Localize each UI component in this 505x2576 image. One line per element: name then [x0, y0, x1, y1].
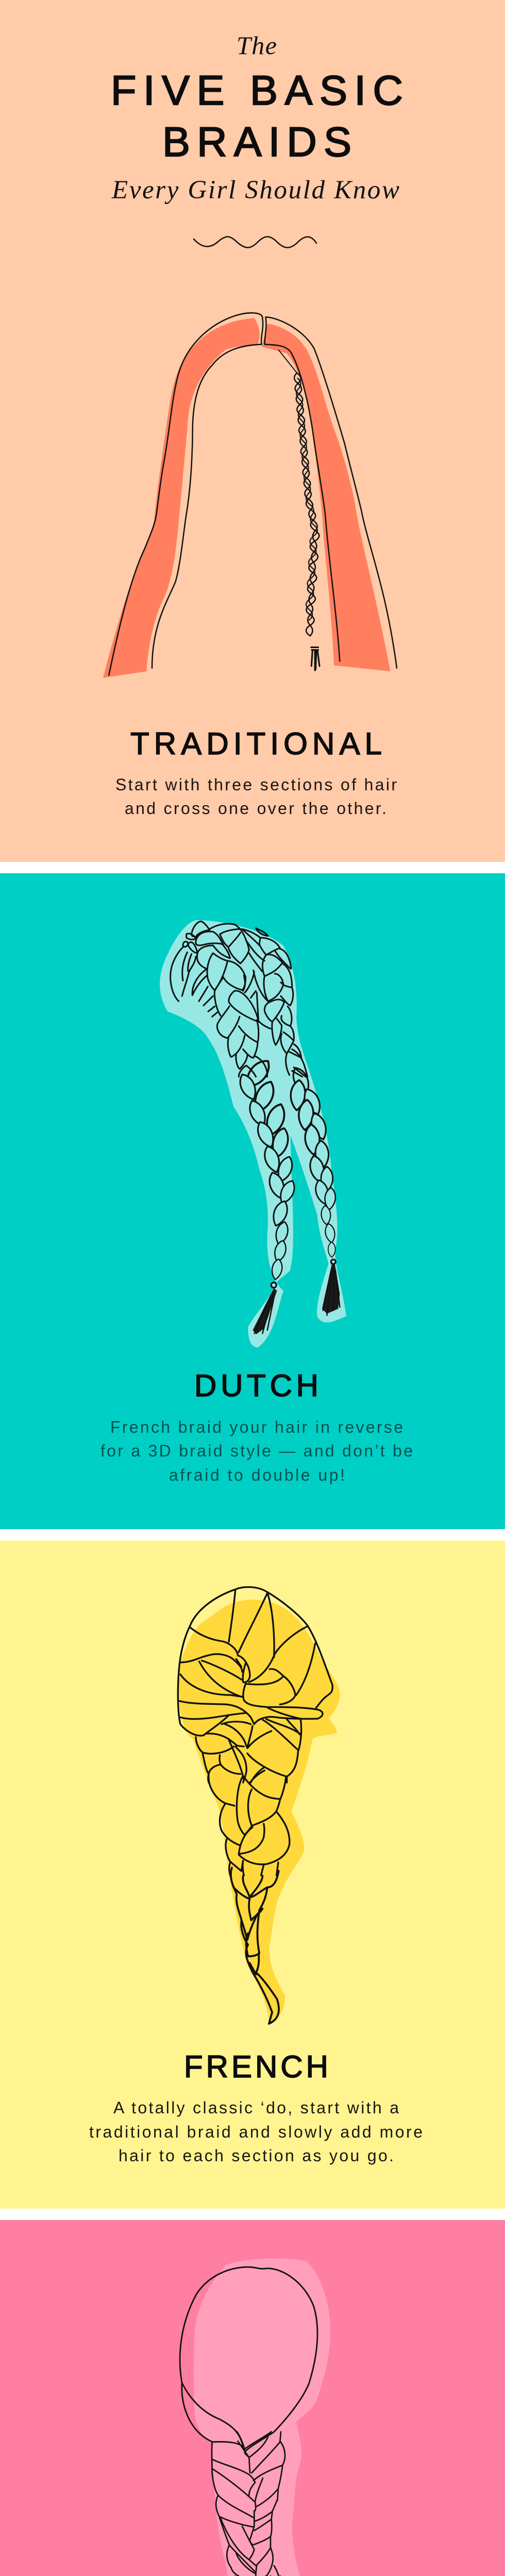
title [111, 31, 403, 205]
panel: traditional braid [0, 0, 505, 862]
description: dutch: French braid your hair in reverse [110, 1418, 403, 1436]
description: french [89, 2098, 423, 2165]
title: Every Girl Should Know [111, 176, 399, 205]
title: BRAIDS [162, 119, 351, 165]
panel: french braid [0, 1540, 505, 2209]
illustration: traditional braid [103, 313, 397, 678]
heading: french: FRENCH [184, 2049, 328, 2084]
description: dutch: afraid to double up! [169, 1466, 345, 1484]
description: french: traditional braid and slowly add more [89, 2123, 423, 2141]
description: french: hair to each section as you go. [119, 2146, 394, 2165]
description: dutch [100, 1418, 413, 1484]
heading: traditional: TRADITIONAL [130, 726, 382, 761]
title: The [237, 31, 277, 60]
description: traditional [115, 775, 397, 818]
icon: wavy divider [194, 237, 316, 247]
illustration: dutch braids [160, 920, 346, 1348]
panel: fishtail braid [0, 2220, 505, 2576]
description: french: A totally classic ‘do, start with a [113, 2098, 399, 2117]
illustration: fishtail braid [180, 2259, 330, 2576]
description: traditional: Start with three sections of hair [115, 775, 397, 794]
illustration: french braid [178, 1587, 340, 2024]
heading: dutch: DUTCH [194, 1368, 318, 1403]
description: traditional: and cross one over the other. [125, 799, 386, 818]
description: dutch: for a 3D braid style — and don’t be [100, 1442, 413, 1460]
panel: dutch braid [0, 873, 505, 1529]
title: FIVE BASIC [111, 67, 403, 114]
